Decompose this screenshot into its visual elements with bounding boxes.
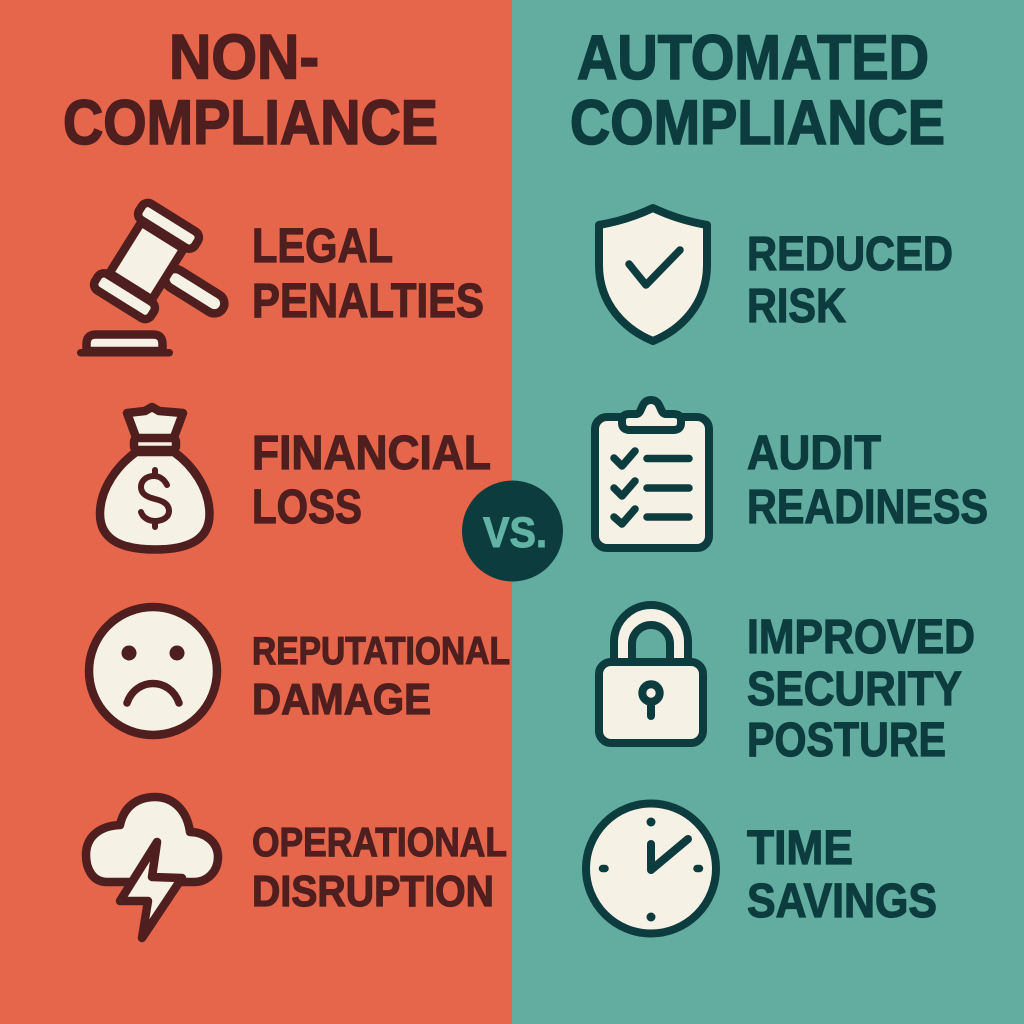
label: reputational damage: DAMAGE: [252, 675, 431, 724]
heading: automated compliance: COMPLIANCE: [570, 88, 945, 158]
icon: gavel: [77, 200, 250, 356]
label: operational disruption: DISRUPTION: [252, 867, 494, 916]
icon: storm cloud: [86, 797, 218, 938]
label: time savings: TIME: [747, 822, 853, 875]
badge: vs.: [462, 480, 563, 582]
label: reduced risk: RISK: [747, 280, 846, 333]
label: financial loss: LOSS: [252, 481, 362, 534]
label: legal penalties: LEGAL: [252, 220, 393, 273]
label: legal penalties: [252, 220, 484, 328]
icon: padlock: [599, 605, 703, 743]
label: audit readiness: READINESS: [747, 481, 988, 534]
label: reputational damage: REPUTATIONAL: [252, 630, 510, 673]
label: improved security posture: SECURITY: [747, 663, 962, 716]
badge: vs.: VS.: [483, 509, 547, 557]
label: legal penalties: PENALTIES: [252, 275, 484, 328]
heading: non-compliance: [63, 22, 438, 158]
label: reputational damage: [252, 630, 510, 724]
label: operational disruption: OPERATIONAL: [252, 819, 507, 865]
label: audit readiness: AUDIT: [747, 427, 881, 480]
icon: money bag: [100, 407, 210, 550]
heading: automated compliance: [570, 23, 945, 158]
label: audit readiness: [747, 427, 988, 534]
icon: sad face: [89, 607, 217, 735]
label: improved security posture: POSTURE: [747, 714, 946, 767]
icon: shield with check: [599, 208, 707, 341]
label: financial loss: FINANCIAL: [252, 427, 491, 480]
panel: automated compliance background: [512, 0, 1024, 1024]
label: reduced risk: [747, 228, 953, 333]
heading: automated compliance: AUTOMATED: [577, 23, 929, 93]
label: operational disruption: [252, 819, 507, 916]
label: time savings: [747, 822, 937, 928]
heading: non-compliance: COMPLIANCE: [63, 88, 438, 158]
label: improved security posture: IMPROVED: [747, 611, 975, 664]
label: reduced risk: REDUCED: [747, 228, 953, 281]
icon: clipboard checklist: [595, 400, 709, 548]
icon: clock: [586, 804, 716, 934]
panel: non-compliance background: [0, 0, 512, 1024]
label: improved security posture: [747, 611, 975, 767]
label: financial loss: [252, 427, 491, 534]
label: time savings: SAVINGS: [747, 875, 937, 928]
heading: non-compliance: NON-: [169, 22, 319, 92]
